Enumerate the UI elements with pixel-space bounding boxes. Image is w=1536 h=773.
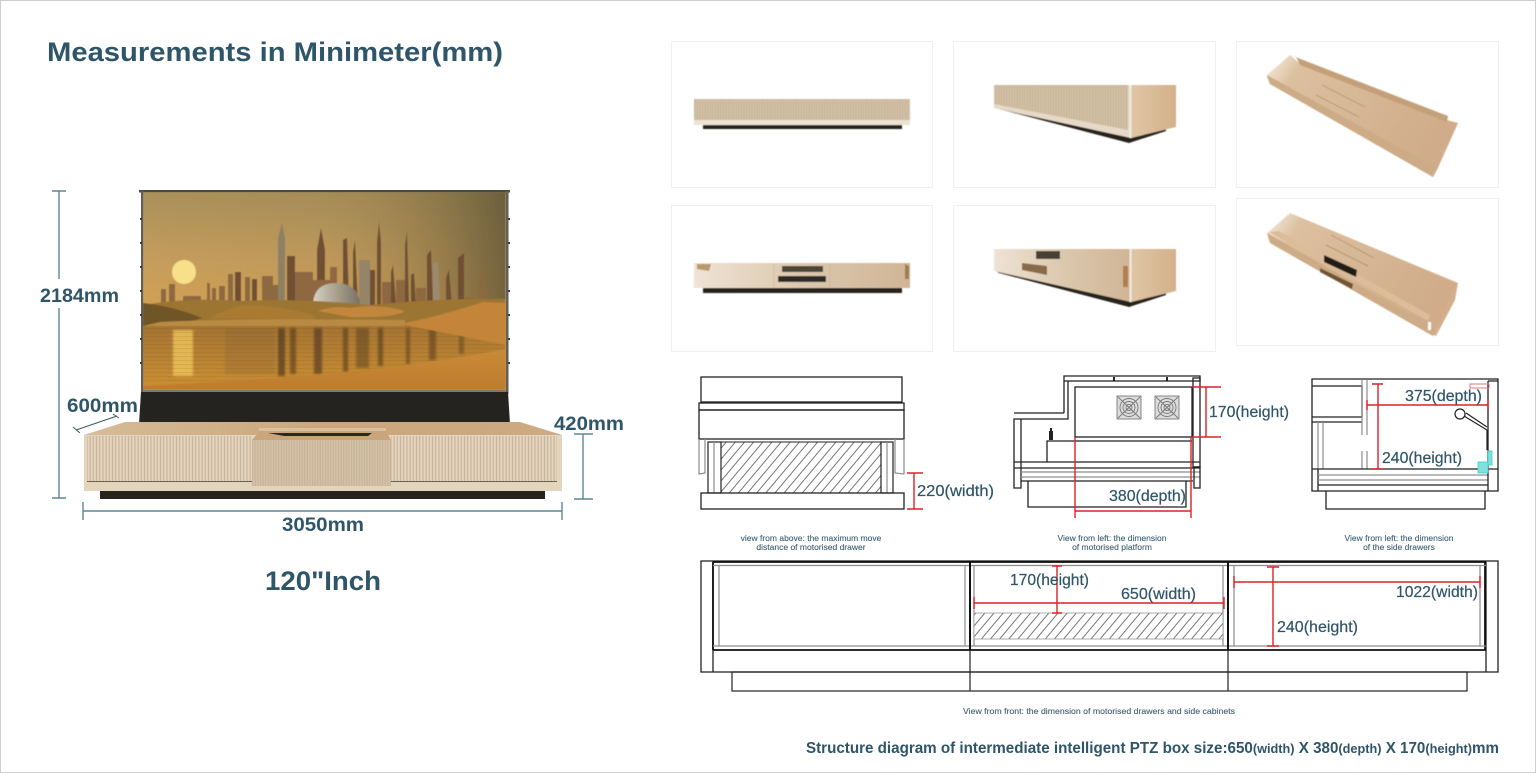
projected desert city image <box>143 192 506 390</box>
title: Measurements in Minimeter(mm) <box>47 37 503 67</box>
dimension: 240 height: 240(height) <box>1382 450 1462 467</box>
dimension: 220 width <box>907 473 994 509</box>
photo panel: back open <box>672 206 932 352</box>
dimension: 650 width: 650(width) <box>1121 586 1196 603</box>
icon: cooling fan <box>1117 396 1141 419</box>
dimension: 240 height front <box>1267 567 1358 646</box>
dimension: 170 height front <box>1010 566 1089 613</box>
dimension: 220 width: 220(width) <box>917 483 994 500</box>
product illustration: floor-rising screen on TV cabinet <box>84 190 562 499</box>
caption: view from above: view from above: the maximum move <box>741 533 882 543</box>
water reflections <box>173 328 464 376</box>
dimension: width 3050mm <box>83 502 562 536</box>
foreground sand <box>143 302 506 390</box>
dimension: 170 height front: 170(height) <box>1010 572 1089 589</box>
dimension: 170 height <box>1192 387 1289 437</box>
dunes <box>151 298 506 326</box>
photo panel: top view closed <box>1236 42 1498 188</box>
skyline <box>161 222 484 308</box>
dimension: 380 depth: 380(depth) <box>1109 488 1186 505</box>
caption: view from left, platform: View from left: the dimension <box>1058 533 1167 543</box>
dimension: depth 600mm: 600mm <box>67 396 138 417</box>
dimension: cabinet height 420mm <box>554 414 624 499</box>
caption: view from front: View from front: the dimension of motorised drawers and side cabinets <box>963 706 1235 716</box>
photo panel: front closed <box>672 42 932 188</box>
photo panel: angled closed <box>954 42 1216 188</box>
caption: view from left, platform: of motorised platform <box>1072 542 1152 552</box>
dimension: cabinet height 420mm: 420mm <box>554 414 624 435</box>
icon: cyan bracket <box>1478 451 1492 473</box>
dimension: height 2184mm: 2184mm <box>40 286 119 307</box>
diagram: view from above, motorised drawer <box>699 377 994 509</box>
footer: structure diagram size note: Structure diagram of intermediate intelligent PTZ box size:650(width) X 380(depth) X 170(height)mm <box>806 740 1499 757</box>
diagram: view from left, motorised platform <box>1014 376 1289 518</box>
cabinet <box>84 422 562 499</box>
dimension: height 2184mm <box>40 191 119 498</box>
dimension: 375 depth: 375(depth) <box>1405 388 1482 405</box>
dimension: 240 height <box>1372 384 1462 469</box>
caption: view from left, side drawers: View from left: the dimension <box>1345 533 1454 543</box>
dimension: 650 width <box>974 586 1224 609</box>
screen frame <box>139 190 510 424</box>
hatched drawer <box>974 613 1223 639</box>
dimension: 1022 width <box>1234 576 1480 601</box>
dimension: 380 depth <box>1075 437 1191 518</box>
dome <box>313 283 360 304</box>
screen size label: 120"Inch <box>265 566 381 596</box>
dimension: width 3050mm: 3050mm <box>282 515 364 536</box>
diagram: view from front <box>701 561 1498 691</box>
dimension: depth 600mm <box>67 396 138 433</box>
photo panel: top view open <box>1236 198 1498 346</box>
icon: hinge arm <box>1455 409 1487 450</box>
caption: view from left, side drawers: of the side drawers <box>1363 542 1435 552</box>
dimension: 375 depth <box>1367 388 1488 410</box>
dimension: 170 height: 170(height) <box>1209 404 1289 421</box>
diagram: view from left, side drawers <box>1312 379 1498 509</box>
icon: cooling fan <box>1155 396 1179 419</box>
water <box>143 326 506 390</box>
dimension: 240 height front: 240(height) <box>1277 619 1358 636</box>
photo panel: angled open <box>954 206 1216 352</box>
dimension: 1022 width: 1022(width) <box>1396 584 1478 601</box>
caption: view from above: distance of motorised drawer <box>756 542 866 552</box>
